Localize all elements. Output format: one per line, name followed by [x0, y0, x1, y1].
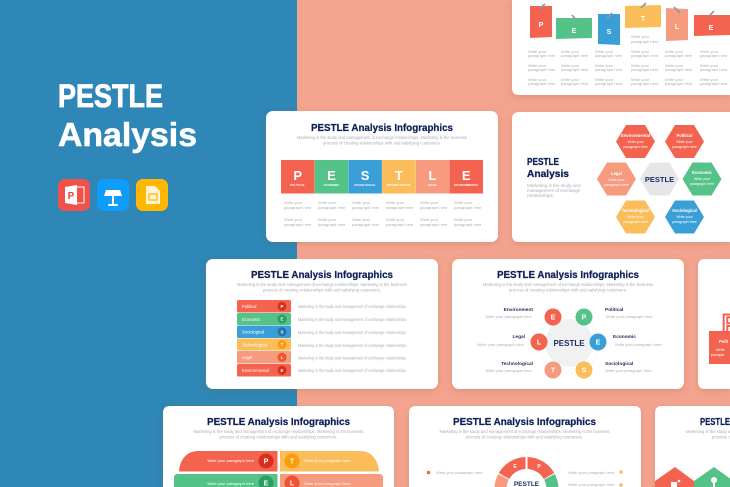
heading: Analysis: [527, 168, 569, 180]
subtitle: [440, 429, 610, 440]
row: Political: [237, 300, 291, 312]
panel: PESTLE column bars slide: [266, 111, 498, 242]
node: E: [590, 334, 606, 350]
label: Environment: Write your paragraph here: [485, 314, 533, 319]
hexagon: Technological: [616, 200, 655, 234]
red box: Polit: [719, 339, 729, 344]
column captions: paragraph here: [420, 205, 448, 210]
red box: paragra: [711, 353, 725, 357]
hexagon: Political: Write your: [676, 140, 693, 144]
hexagon: Economic: Economic: [692, 170, 713, 175]
node: S: [576, 362, 592, 378]
row descriptions: Marketing is the study and management of exchange relationships.: [298, 304, 407, 309]
sticky note captions: Write your: [561, 49, 580, 54]
column: E environmental: E: [462, 168, 471, 183]
row descriptions: Marketing is the study and management of exchange relationships.: [298, 356, 407, 360]
block: E: Write your paragraph here: [207, 481, 255, 486]
column captions: paragraph here: [284, 205, 312, 210]
sticky note captions: Write your: [700, 49, 719, 54]
column captions: [284, 200, 482, 227]
left legend item: Write your paragraph here: [436, 470, 483, 475]
label: Economic: Write your paragraph here: [615, 342, 662, 347]
row: Economic: [237, 313, 291, 325]
sticky note captions: Write your: [595, 49, 614, 54]
subtitle: [686, 429, 730, 440]
subtitle: process of creating relationships with and satisfying customers.: [509, 288, 627, 292]
column captions: Write your: [284, 217, 303, 222]
column captions: Write your: [420, 217, 439, 222]
icon: PowerPoint: [58, 179, 90, 211]
icon: Keynote: [97, 179, 129, 211]
node: E: E: [596, 340, 601, 346]
row descriptions: Marketing is the study and management of exchange relationships.: [298, 343, 407, 348]
column: E economic: [315, 160, 348, 194]
panel: dome quadrant slide: [163, 406, 394, 487]
hexagon: Political: [665, 125, 704, 158]
sticky note captions: [528, 34, 728, 86]
sticky note captions: paragraph here: [528, 81, 556, 86]
node: E: [544, 308, 562, 326]
heading: PESTLE Analysis Infographics: [251, 269, 393, 281]
heading: PESTLE Analysis Infographics: [497, 269, 639, 281]
hexagon: Economic: paragraph here: [690, 182, 714, 186]
sticky note: T: [625, 3, 661, 28]
column captions: paragraph here: [318, 205, 346, 210]
heading: [527, 156, 569, 180]
column captions: Write your: [420, 200, 439, 205]
subtitle: process of creating relationships with and satisfying customers.: [466, 434, 584, 440]
subtitle: process of creating relationships with and satisfying customers.: [263, 288, 381, 292]
sticky note captions: Write your: [631, 63, 650, 68]
subtitle: Marketing is the study and management of exchange relationships. Marketing is the business: [297, 135, 468, 140]
sticky note captions: Write your: [561, 77, 580, 82]
column: T technological: [382, 160, 416, 194]
block: T: Write your paragraph here: [304, 458, 351, 463]
sticky note: T: T: [641, 16, 646, 23]
heading: PESTLE Analysis Infographics: [311, 122, 453, 134]
description: [527, 183, 581, 198]
sticky note captions: paragraph here: [528, 53, 556, 58]
row: Environmental: Environmental: [242, 368, 269, 373]
panel: list rows slide: [206, 259, 438, 389]
sticky note captions: Write your: [528, 49, 547, 54]
subtitle: Marketing is the study and management of exchange relationships. Marketing is the business: [194, 429, 364, 434]
row descriptions: Marketing is the study and management of exchange relationships.: [298, 330, 407, 335]
icon: PowerPoint: P: [68, 191, 75, 202]
red house shape: [655, 467, 694, 487]
subtitle: Marketing is the study and management of exchange relationships. Marketing is the business: [483, 282, 654, 287]
column captions: Write your: [386, 217, 405, 222]
label: Legal: [477, 334, 525, 347]
column: L legal: L: [429, 168, 437, 183]
column captions: paragraph here: [386, 222, 414, 227]
label: Technological: Write your paragraph here: [485, 368, 533, 373]
sticky note captions: Write your: [631, 49, 650, 54]
column captions: Write your: [352, 217, 371, 222]
right legend item lower: Write your paragraph here: [568, 482, 615, 487]
panel: circular diagram slide: [452, 259, 684, 389]
node: T: T: [551, 368, 556, 374]
main title: PESTLE: [58, 78, 163, 114]
heading: PESTLE Analysis Infographics: [207, 416, 350, 428]
sticky note captions: Write your: [561, 63, 580, 68]
sticky note captions: Write your: [595, 77, 614, 82]
row descriptions: Marketing is the study and management of exchange relationships.: [298, 368, 407, 373]
hexagon: Political: paragraph here: [672, 145, 697, 149]
icon: Google Slides: [136, 179, 168, 211]
sticky note captions: paragraph here: [561, 67, 589, 72]
hexagon: Sociological: Sociological: [672, 208, 697, 213]
row: Political: P: [280, 304, 284, 309]
column: S sociological: [348, 160, 382, 194]
node: L: L: [537, 340, 542, 346]
column: T technological: T: [395, 168, 403, 183]
main title: Analysis: [58, 116, 197, 153]
sticky note captions: paragraph here: [631, 53, 659, 58]
sticky note: E: [694, 11, 730, 36]
column: P political: [281, 160, 314, 194]
label: Environment: [485, 307, 533, 319]
panel: donut slide: [409, 406, 641, 487]
centre circle: PESTLE: [553, 339, 585, 348]
row descriptions: [298, 304, 407, 373]
column: P political: P: [293, 168, 302, 183]
column: E environmental: [450, 160, 483, 194]
row: Environmental: E: [280, 368, 284, 373]
column: T technological: TECHNOLOGICAL: [387, 183, 411, 187]
hexagon: Political: Political: [676, 133, 693, 138]
subtitle: Marketing is the study and management of exchange relationships. Marketing is the business: [440, 429, 610, 434]
block: P: P: [264, 458, 269, 466]
hexagon: Economic: Write your: [694, 177, 711, 181]
sticky note captions: Write your: [528, 63, 547, 68]
node: S: S: [582, 368, 587, 374]
label: Economic: [613, 334, 662, 347]
column captions: Write your: [352, 200, 371, 205]
node: P: [576, 308, 592, 326]
heading: PESTLE Analysis Infographics: [453, 416, 596, 428]
donut chart: [495, 457, 558, 487]
panel: house shapes slide: [655, 406, 730, 487]
sticky note captions: paragraph here: [700, 53, 728, 58]
panel: hexagon slide: [512, 112, 730, 242]
row descriptions: Marketing is the study and management of exchange relationships.: [298, 317, 407, 322]
background: blue left panel: [0, 0, 297, 487]
right legend item: Write your paragraph here: [568, 470, 615, 475]
donut chart: E: [513, 464, 517, 470]
sticky note: P: [530, 4, 552, 38]
heading: PESTLE: [527, 156, 559, 168]
column captions: paragraph here: [284, 222, 312, 227]
label: Technological: Technological: [501, 361, 533, 367]
sticky note captions: Write your: [631, 77, 650, 82]
sticky note captions: paragraph here: [595, 53, 623, 58]
subtitle: [194, 429, 364, 440]
node: E: E: [551, 314, 556, 322]
sticky note captions: Write your: [665, 49, 684, 54]
sticky note captions: paragraph here: [665, 81, 693, 86]
column: L legal: [416, 160, 449, 194]
column captions: Write your: [284, 200, 303, 205]
row: Legal: [237, 351, 291, 364]
column captions: paragraph here: [352, 205, 380, 210]
sticky note captions: paragraph here: [631, 81, 659, 86]
sticky note captions: paragraph here: [561, 81, 589, 86]
label: Environment: Environment: [504, 307, 533, 313]
label: Legal: Write your paragraph here: [477, 342, 525, 347]
sticky note: L: [666, 7, 688, 41]
label: Economic: Economic: [613, 334, 636, 340]
sticky note captions: Write your: [595, 63, 614, 68]
label: Technological: [485, 361, 533, 373]
hexagon: Environmental: Write your: [627, 140, 644, 144]
column captions: paragraph here: [454, 205, 482, 210]
label: Sociological: [605, 361, 652, 373]
label: Political: [605, 307, 653, 319]
row: Technological: [237, 338, 291, 350]
sticky note: L: L: [675, 24, 680, 31]
hexagon: Legal: Write your: [608, 178, 625, 182]
node: T: [544, 362, 562, 378]
description: management of exchange: [527, 188, 581, 193]
sticky note: E: E: [572, 28, 577, 35]
block: L: Write your paragraph here: [304, 481, 351, 486]
label: Sociological: Write your paragraph here: [605, 368, 652, 373]
subtitle: [237, 282, 408, 292]
hexagon: Legal: paragraph here: [604, 183, 629, 187]
sticky note captions: paragraph here: [665, 53, 693, 58]
row: Economic: Economic: [242, 317, 260, 322]
red box: [709, 331, 730, 364]
column captions: paragraph here: [352, 222, 380, 227]
row: Sociological: [237, 326, 291, 338]
node: P: P: [582, 314, 587, 322]
column captions: Write your: [318, 200, 337, 205]
subtitle: [483, 282, 654, 292]
sticky note captions: paragraph here: [595, 67, 623, 72]
sticky note captions: Write your: [700, 63, 719, 68]
block: P: [179, 451, 278, 472]
label: Sociological: Sociological: [605, 361, 633, 367]
hexagon: Legal: Legal: [611, 171, 622, 176]
row: Economic: E: [280, 317, 284, 322]
label: Political: Political: [605, 307, 623, 313]
column: S sociological: S: [361, 168, 370, 183]
sticky note: E: E: [709, 25, 714, 32]
block: E: [174, 474, 278, 487]
sticky note: E: [556, 15, 592, 39]
column: E economic: ECONOMIC: [324, 183, 339, 187]
column: L legal: LEGAL: [428, 183, 438, 187]
sticky note captions: Write your: [665, 63, 684, 68]
row: Technological: T: [281, 342, 284, 347]
block: T: [280, 451, 379, 472]
row: Sociological: Sociological: [242, 330, 264, 334]
description: relationships.: [527, 193, 554, 198]
column: E environmental: ENVIRONMENTAL: [454, 183, 479, 187]
column captions: paragraph here: [454, 222, 482, 227]
hexagon: Environmental: paragraph here: [623, 145, 648, 149]
hexagon: Technological: Technological: [622, 208, 649, 213]
sticky note: P: P: [539, 22, 544, 29]
hexagon: Legal: [597, 162, 636, 196]
column captions: paragraph here: [420, 222, 448, 227]
red box: Write: [716, 348, 725, 352]
hexagon: Sociological: Write your: [676, 215, 693, 219]
hexagon: PESTLE centre: [640, 162, 679, 196]
column: S sociological: SOCIOLOGICAL: [354, 183, 376, 187]
block: L: [280, 474, 383, 487]
column captions: paragraph here: [386, 205, 414, 210]
sticky note captions: paragraph here: [528, 67, 556, 72]
column captions: Write your: [386, 200, 405, 205]
label: Legal: Legal: [512, 334, 525, 340]
sticky note captions: paragraph here: [595, 81, 623, 86]
donut chart: P: [537, 464, 541, 470]
centre circle: [539, 313, 599, 373]
row: Technological: Technological: [242, 342, 267, 348]
node: L: [530, 334, 548, 350]
block: T: T: [290, 458, 295, 466]
hexagon: Sociological: paragraph here: [672, 220, 697, 224]
column captions: Write your: [318, 217, 337, 222]
subtitle: process of creating relationships with and satisfying customers.: [220, 434, 338, 440]
label: Political: Write your paragraph here: [606, 314, 653, 319]
row: Political: Political: [242, 304, 256, 309]
sticky note: S: S: [607, 29, 612, 36]
sticky note captions: Write your: [631, 34, 650, 39]
green house shape: [694, 467, 730, 487]
sticky note captions: paragraph here: [561, 53, 589, 58]
main title: [58, 78, 197, 153]
block: P: Write your paragraph here: [207, 458, 255, 463]
column captions: paragraph here: [318, 222, 346, 227]
subtitle: [297, 135, 468, 146]
panel: sticky notes slide: [512, 0, 730, 95]
column captions: Write your: [454, 217, 473, 222]
sticky note captions: paragraph here: [700, 81, 728, 86]
subtitle: process of creating relationships with and satisfying customers.: [323, 140, 441, 146]
sticky note captions: paragraph here: [631, 39, 659, 44]
subtitle: Marketing is the study and management of exchange relationships. Marketing is the business: [237, 282, 408, 287]
panel: cropped letter slide: [698, 259, 730, 389]
sticky note captions: paragraph here: [631, 67, 659, 72]
column captions: Write your: [454, 200, 473, 205]
hexagon: PESTLE centre: PESTLE: [645, 175, 674, 184]
row: Environmental: [237, 364, 291, 376]
sticky note captions: Write your: [665, 77, 684, 82]
sticky note captions: Write your: [700, 77, 719, 82]
background: peach right panel: [297, 0, 730, 487]
column: P political: POLITICAL: [290, 183, 305, 187]
sticky note captions: paragraph here: [665, 67, 693, 72]
column: E economic: E: [327, 168, 336, 183]
sticky note: S: [598, 13, 620, 45]
sticky note captions: Write your: [528, 77, 547, 82]
row: Legal: L: [281, 355, 284, 360]
row: Legal: Legal: [242, 355, 252, 360]
hexagon: Economic: [682, 162, 722, 196]
hexagon: Technological: Write your: [627, 215, 644, 219]
hexagon: Environmental: Environmental: [621, 133, 650, 138]
row: Sociological: S: [280, 330, 284, 334]
hexagon: Sociological: [665, 200, 704, 234]
hexagon: Environmental: [616, 125, 655, 158]
hexagon: Technological: paragraph here: [623, 220, 648, 224]
description: Marketing is the study and: [527, 183, 581, 188]
sticky note captions: paragraph here: [700, 67, 728, 72]
